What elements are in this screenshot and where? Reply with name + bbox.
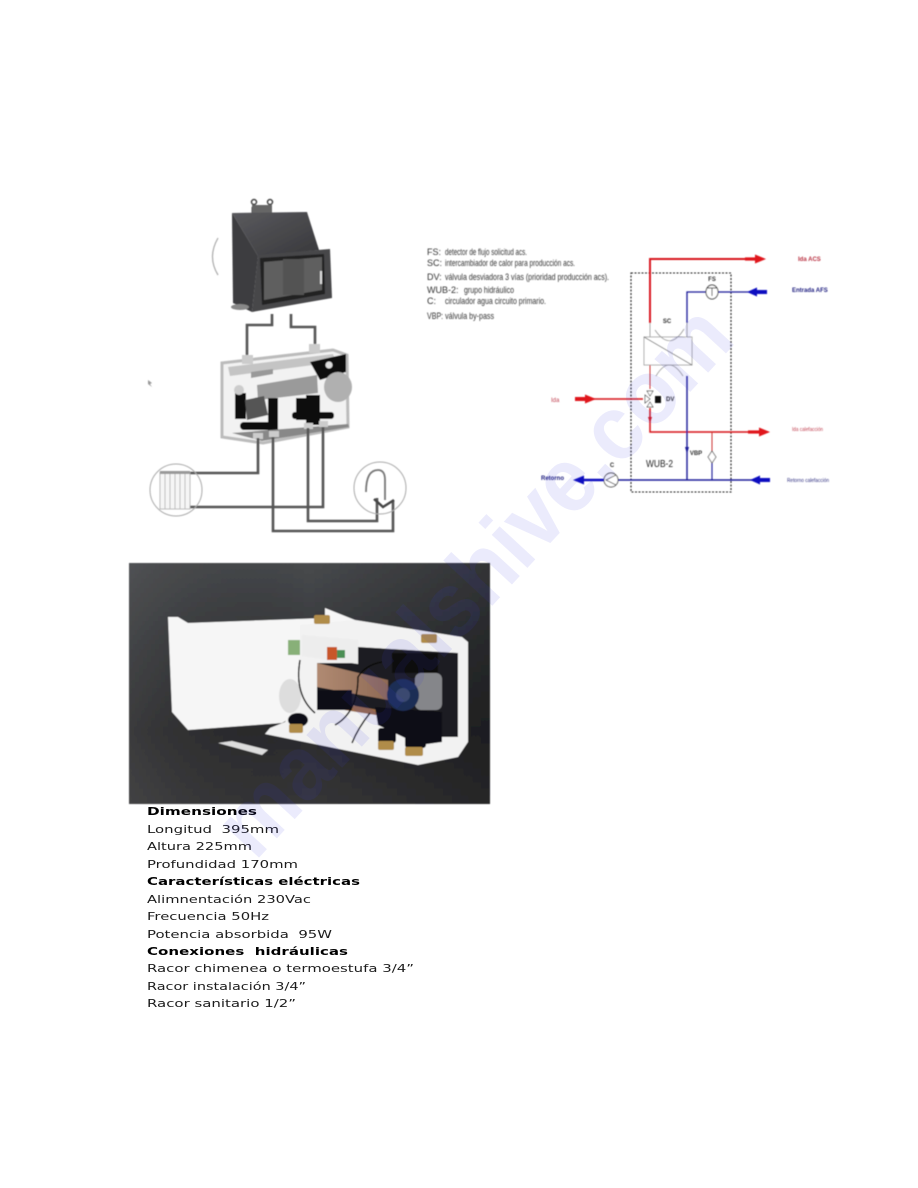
pipes from fireplace to unit bbox=[247, 314, 315, 357]
product photo of the WUB-2 unit bbox=[129, 563, 490, 804]
technical specifications text: Racor sanitario 1/2” bbox=[147, 997, 296, 1010]
legend of schematic abbreviations: válvula desviadora 3 vías (prioridad producción acs). bbox=[445, 272, 609, 282]
icon: tap bbox=[354, 462, 406, 514]
primary return, Retorno: Retorno bbox=[541, 476, 564, 482]
lower copper pipe bbox=[338, 703, 425, 723]
arc mark left of fireplace bbox=[212, 238, 218, 275]
legend of schematic abbreviations: C: bbox=[427, 296, 436, 306]
circulator pump C: C bbox=[610, 463, 615, 469]
technical specifications text: Conexiones hidráulicas bbox=[147, 945, 349, 958]
cold water inlet line, Entrada AFS bbox=[687, 288, 828, 323]
technical specifications text: Altura 225mm bbox=[147, 840, 252, 853]
bypass valve VBP bbox=[690, 432, 716, 480]
technical specifications text: Dimensiones bbox=[147, 805, 258, 818]
dashed unit boundary bbox=[631, 273, 731, 492]
technical specifications text: Racor chimenea o termoestufa 3/4” bbox=[147, 962, 414, 975]
icon: radiator bbox=[150, 464, 202, 516]
diverter valve DV bbox=[645, 391, 674, 407]
bypass valve VBP: VBP bbox=[690, 451, 702, 457]
dark interior bbox=[317, 647, 458, 737]
photo background side shading bbox=[129, 563, 490, 804]
circulator pump C bbox=[604, 463, 618, 487]
heat exchanger SC: SC bbox=[663, 319, 672, 325]
heat exchanger SC bbox=[644, 319, 692, 376]
paper strip bbox=[218, 741, 268, 755]
hot water outlet line, Ida ACS bbox=[650, 254, 821, 323]
legend of schematic abbreviations: WUB-2: bbox=[427, 285, 458, 295]
copper heat exchanger bbox=[317, 663, 388, 700]
legend of schematic abbreviations: circulador agua circuito primario. bbox=[445, 296, 546, 306]
circulator pump bbox=[387, 653, 442, 711]
icon: fireplace insert bbox=[231, 200, 332, 312]
primary inlet, Ida: Ida bbox=[551, 398, 560, 404]
legend of schematic abbreviations: SC: bbox=[427, 258, 442, 268]
diverter valve DV: DV bbox=[666, 397, 674, 403]
technical specifications text: Frecuencia 50Hz bbox=[147, 910, 269, 923]
blue internal line bbox=[685, 376, 689, 480]
hot water outlet line, Ida ACS: Ida ACS bbox=[798, 257, 821, 263]
legend of schematic abbreviations: FS: bbox=[427, 247, 441, 257]
legend of schematic abbreviations: DV: bbox=[427, 272, 442, 282]
control box bbox=[288, 635, 358, 664]
small stray mark bbox=[148, 380, 152, 387]
icon: hydraulic unit bbox=[222, 344, 352, 443]
cables bbox=[299, 660, 382, 743]
technical specifications text: Racor instalación 3/4” bbox=[147, 980, 306, 993]
legend of schematic abbreviations: intercambiador de calor para producción acs. bbox=[445, 258, 575, 268]
watermark: manualshive.com bbox=[195, 285, 752, 876]
heating flow line, Ida calefacción bbox=[648, 408, 823, 436]
legend of schematic abbreviations: detector de flujo solicitud acs. bbox=[445, 247, 527, 257]
pipes from unit to radiator and tap bbox=[190, 427, 393, 531]
black fittings bbox=[288, 690, 442, 748]
heating flow line, Ida calefacción: Ida calefacción bbox=[792, 427, 823, 433]
heating return line, Retorno calefacción: Retorno calefacción bbox=[787, 478, 829, 484]
technical specifications text: Profundidad 170mm bbox=[147, 858, 298, 871]
photo background bbox=[129, 563, 490, 804]
technical specifications text: Potencia absorbida 95W bbox=[147, 928, 332, 941]
small white fixture bbox=[279, 679, 301, 713]
technical specifications text: Características eléctricas bbox=[147, 875, 361, 888]
legend of schematic abbreviations: VBP: válvula by-pass bbox=[427, 311, 494, 321]
cover panel bbox=[168, 608, 355, 730]
primary inlet, Ida bbox=[551, 394, 643, 404]
heating return line, Retorno calefacción bbox=[617, 476, 829, 484]
flow switch FS: FS bbox=[708, 277, 716, 283]
technical specifications text: Alimnentación 230Vac bbox=[147, 893, 311, 906]
brass connectors bbox=[289, 615, 437, 756]
cold water inlet line, Entrada AFS: Entrada AFS bbox=[792, 288, 828, 294]
unit label WUB-2: WUB-2 bbox=[646, 459, 673, 470]
technical specifications text bbox=[147, 805, 414, 1010]
legend of schematic abbreviations bbox=[427, 247, 609, 321]
installation diagram: fireplace, hydraulic unit, radiator and tap bbox=[148, 200, 406, 531]
technical specifications text: Longitud 395mm bbox=[147, 823, 279, 836]
primary return, Retorno bbox=[541, 476, 604, 484]
flow switch FS bbox=[706, 277, 718, 299]
legend of schematic abbreviations: grupo hidráulico bbox=[464, 285, 514, 295]
frame and bottom plate bbox=[265, 620, 468, 765]
hydraulic schematic WUB-2 bbox=[541, 254, 829, 492]
